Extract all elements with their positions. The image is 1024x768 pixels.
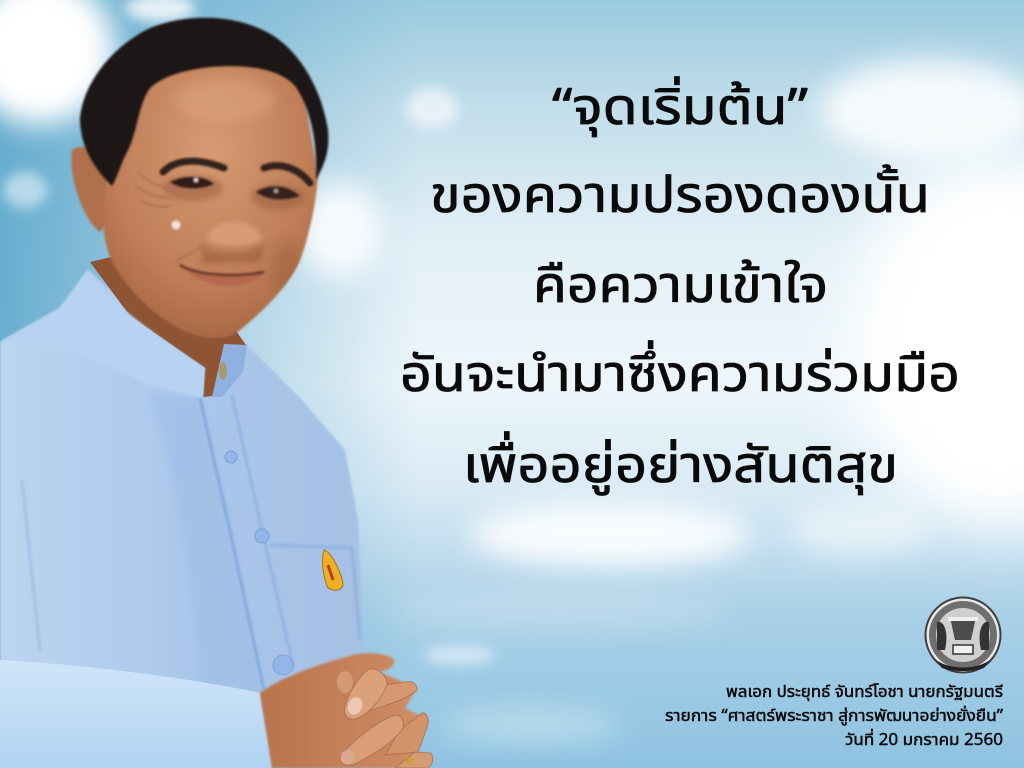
cheek shadow — [271, 239, 299, 291]
cheek highlight — [172, 220, 180, 230]
credit line 2: รายการ “ศาสตร์พระราชา สู่การพัฒนาอย่างยั่งยืน” — [665, 705, 1003, 729]
fingers — [340, 669, 433, 768]
nose shadow — [202, 242, 264, 264]
mouth — [180, 265, 264, 286]
eye sockets — [163, 175, 223, 201]
credit line 1: พลเอก ประยุทธ์ จันทร์โอชา นายกรัฐมนตรี — [726, 681, 1003, 705]
face — [103, 50, 318, 338]
quote line 5: เพื่ออยู่อย่างสันติสุข — [463, 429, 898, 505]
collar — [0, 270, 205, 398]
eyebrows — [163, 161, 310, 183]
eyes — [170, 177, 300, 199]
hair — [80, 18, 328, 186]
face shading — [135, 78, 305, 291]
credit text — [665, 681, 1003, 753]
quote line 3: คือความเข้าใจ — [533, 249, 828, 325]
forehead highlight — [175, 78, 275, 122]
pocket pin — [323, 550, 343, 590]
shirt body — [0, 270, 364, 768]
clasped hands — [260, 653, 433, 768]
government seal — [924, 596, 1002, 674]
ear — [71, 147, 108, 232]
cuff — [0, 660, 272, 768]
arm shading — [150, 395, 262, 692]
knuckle finger — [337, 671, 353, 693]
portrait: smiling man in light blue shirt — [0, 18, 433, 768]
fingernails — [345, 695, 365, 717]
collar right side — [212, 344, 247, 397]
quote line 1: “จุดเริ่มต้น” — [552, 71, 808, 147]
shirt folds and placket — [22, 396, 360, 690]
collar clasp — [219, 362, 227, 380]
main quote — [400, 71, 960, 505]
nose — [206, 222, 262, 246]
neck — [90, 250, 246, 397]
quote line 4: อันจะนำมาซึ่งความร่วมมือ — [400, 338, 960, 414]
credit line 3: วันที่ 20 มกราคม 2560 — [845, 728, 1003, 753]
cheek wrinkles — [135, 172, 205, 262]
quote line 2: ของความปรองดองนั้น — [430, 159, 930, 235]
shirt buttons — [225, 451, 293, 675]
